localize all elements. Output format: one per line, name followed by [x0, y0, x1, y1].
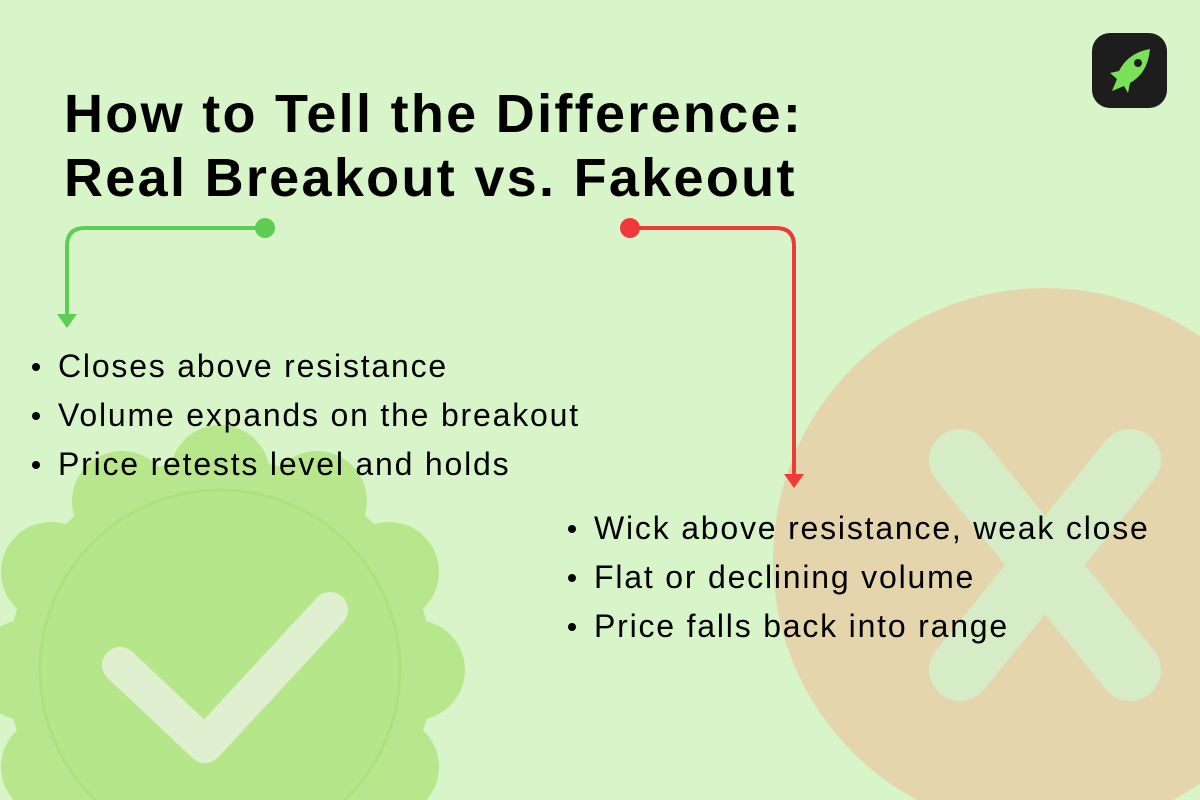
logo: rocket [1092, 33, 1167, 108]
list: real breakout: Closes above resistance [58, 348, 448, 384]
title [64, 84, 803, 208]
list: real breakout: Volume expands on the breakout [58, 397, 580, 433]
arrow: red [620, 218, 804, 488]
list: fakeout: Price falls back into range [594, 608, 1009, 644]
background badge: cross [773, 288, 1200, 800]
title: Real Breakout vs. Fakeout [64, 148, 797, 208]
list: real breakout [32, 348, 580, 482]
list: fakeout: Wick above resistance, weak close [594, 510, 1150, 546]
arrow: green [57, 218, 275, 328]
list: fakeout: Flat or declining volume [594, 559, 975, 595]
list: real breakout: Price retests level and holds [58, 446, 510, 482]
title: How to Tell the Difference: [64, 84, 803, 144]
list: fakeout [568, 510, 1150, 644]
